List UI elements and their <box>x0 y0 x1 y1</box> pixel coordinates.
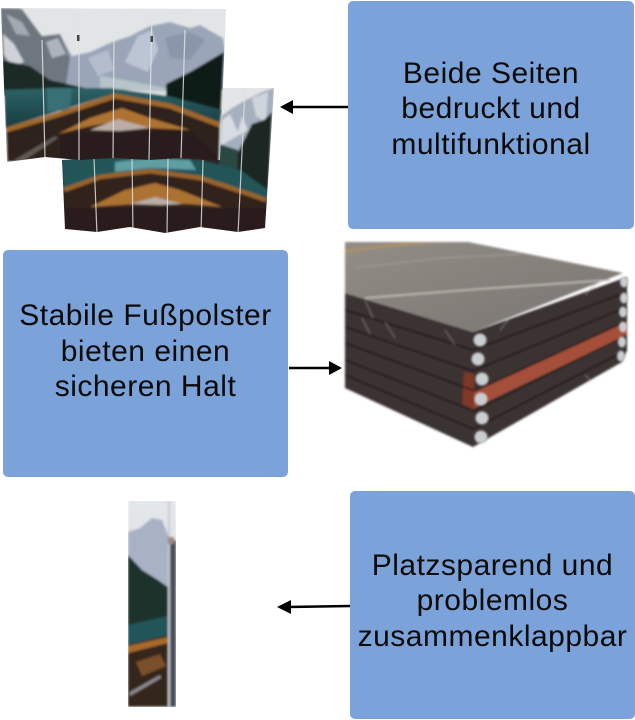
arrow: to folded screen <box>277 600 350 614</box>
arrow: to stack photo <box>289 361 342 375</box>
stack feet <box>472 276 628 444</box>
layer lines <box>345 292 627 429</box>
panel: stabile Fußpolster: sicheren Halt <box>55 370 236 403</box>
screen upper first side <box>0 6 230 164</box>
stack base <box>345 277 627 447</box>
photo: folding screen, both sides <box>0 6 280 235</box>
panel: platzsparend: zusammenklappbar <box>358 620 627 653</box>
panel: stabile Fußpolster: Stabile Fußpolster <box>19 299 272 332</box>
panel: platzsparend: Platzsparend und <box>372 549 613 582</box>
arrow: to top photo <box>280 100 348 114</box>
panel: platzsparend: problemlos <box>417 584 568 617</box>
stack top face <box>345 242 623 332</box>
photo: stacked screen panels with feet <box>345 242 628 447</box>
panel: beide Seiten bedruckt: bedruckt und <box>401 92 581 125</box>
screen lower second side <box>55 85 280 235</box>
panel: stabile Fußpolster <box>3 250 288 477</box>
photo: folded screen <box>128 500 176 708</box>
orange layer <box>474 322 627 408</box>
panel: platzsparend <box>350 491 635 719</box>
panel: beide Seiten bedruckt <box>348 1 634 229</box>
panel: beide Seiten bedruckt: Beide Seiten <box>403 57 579 90</box>
panel: stabile Fußpolster: bieten einen <box>61 335 230 368</box>
panel: beide Seiten bedruckt: multifunktional <box>391 128 591 161</box>
